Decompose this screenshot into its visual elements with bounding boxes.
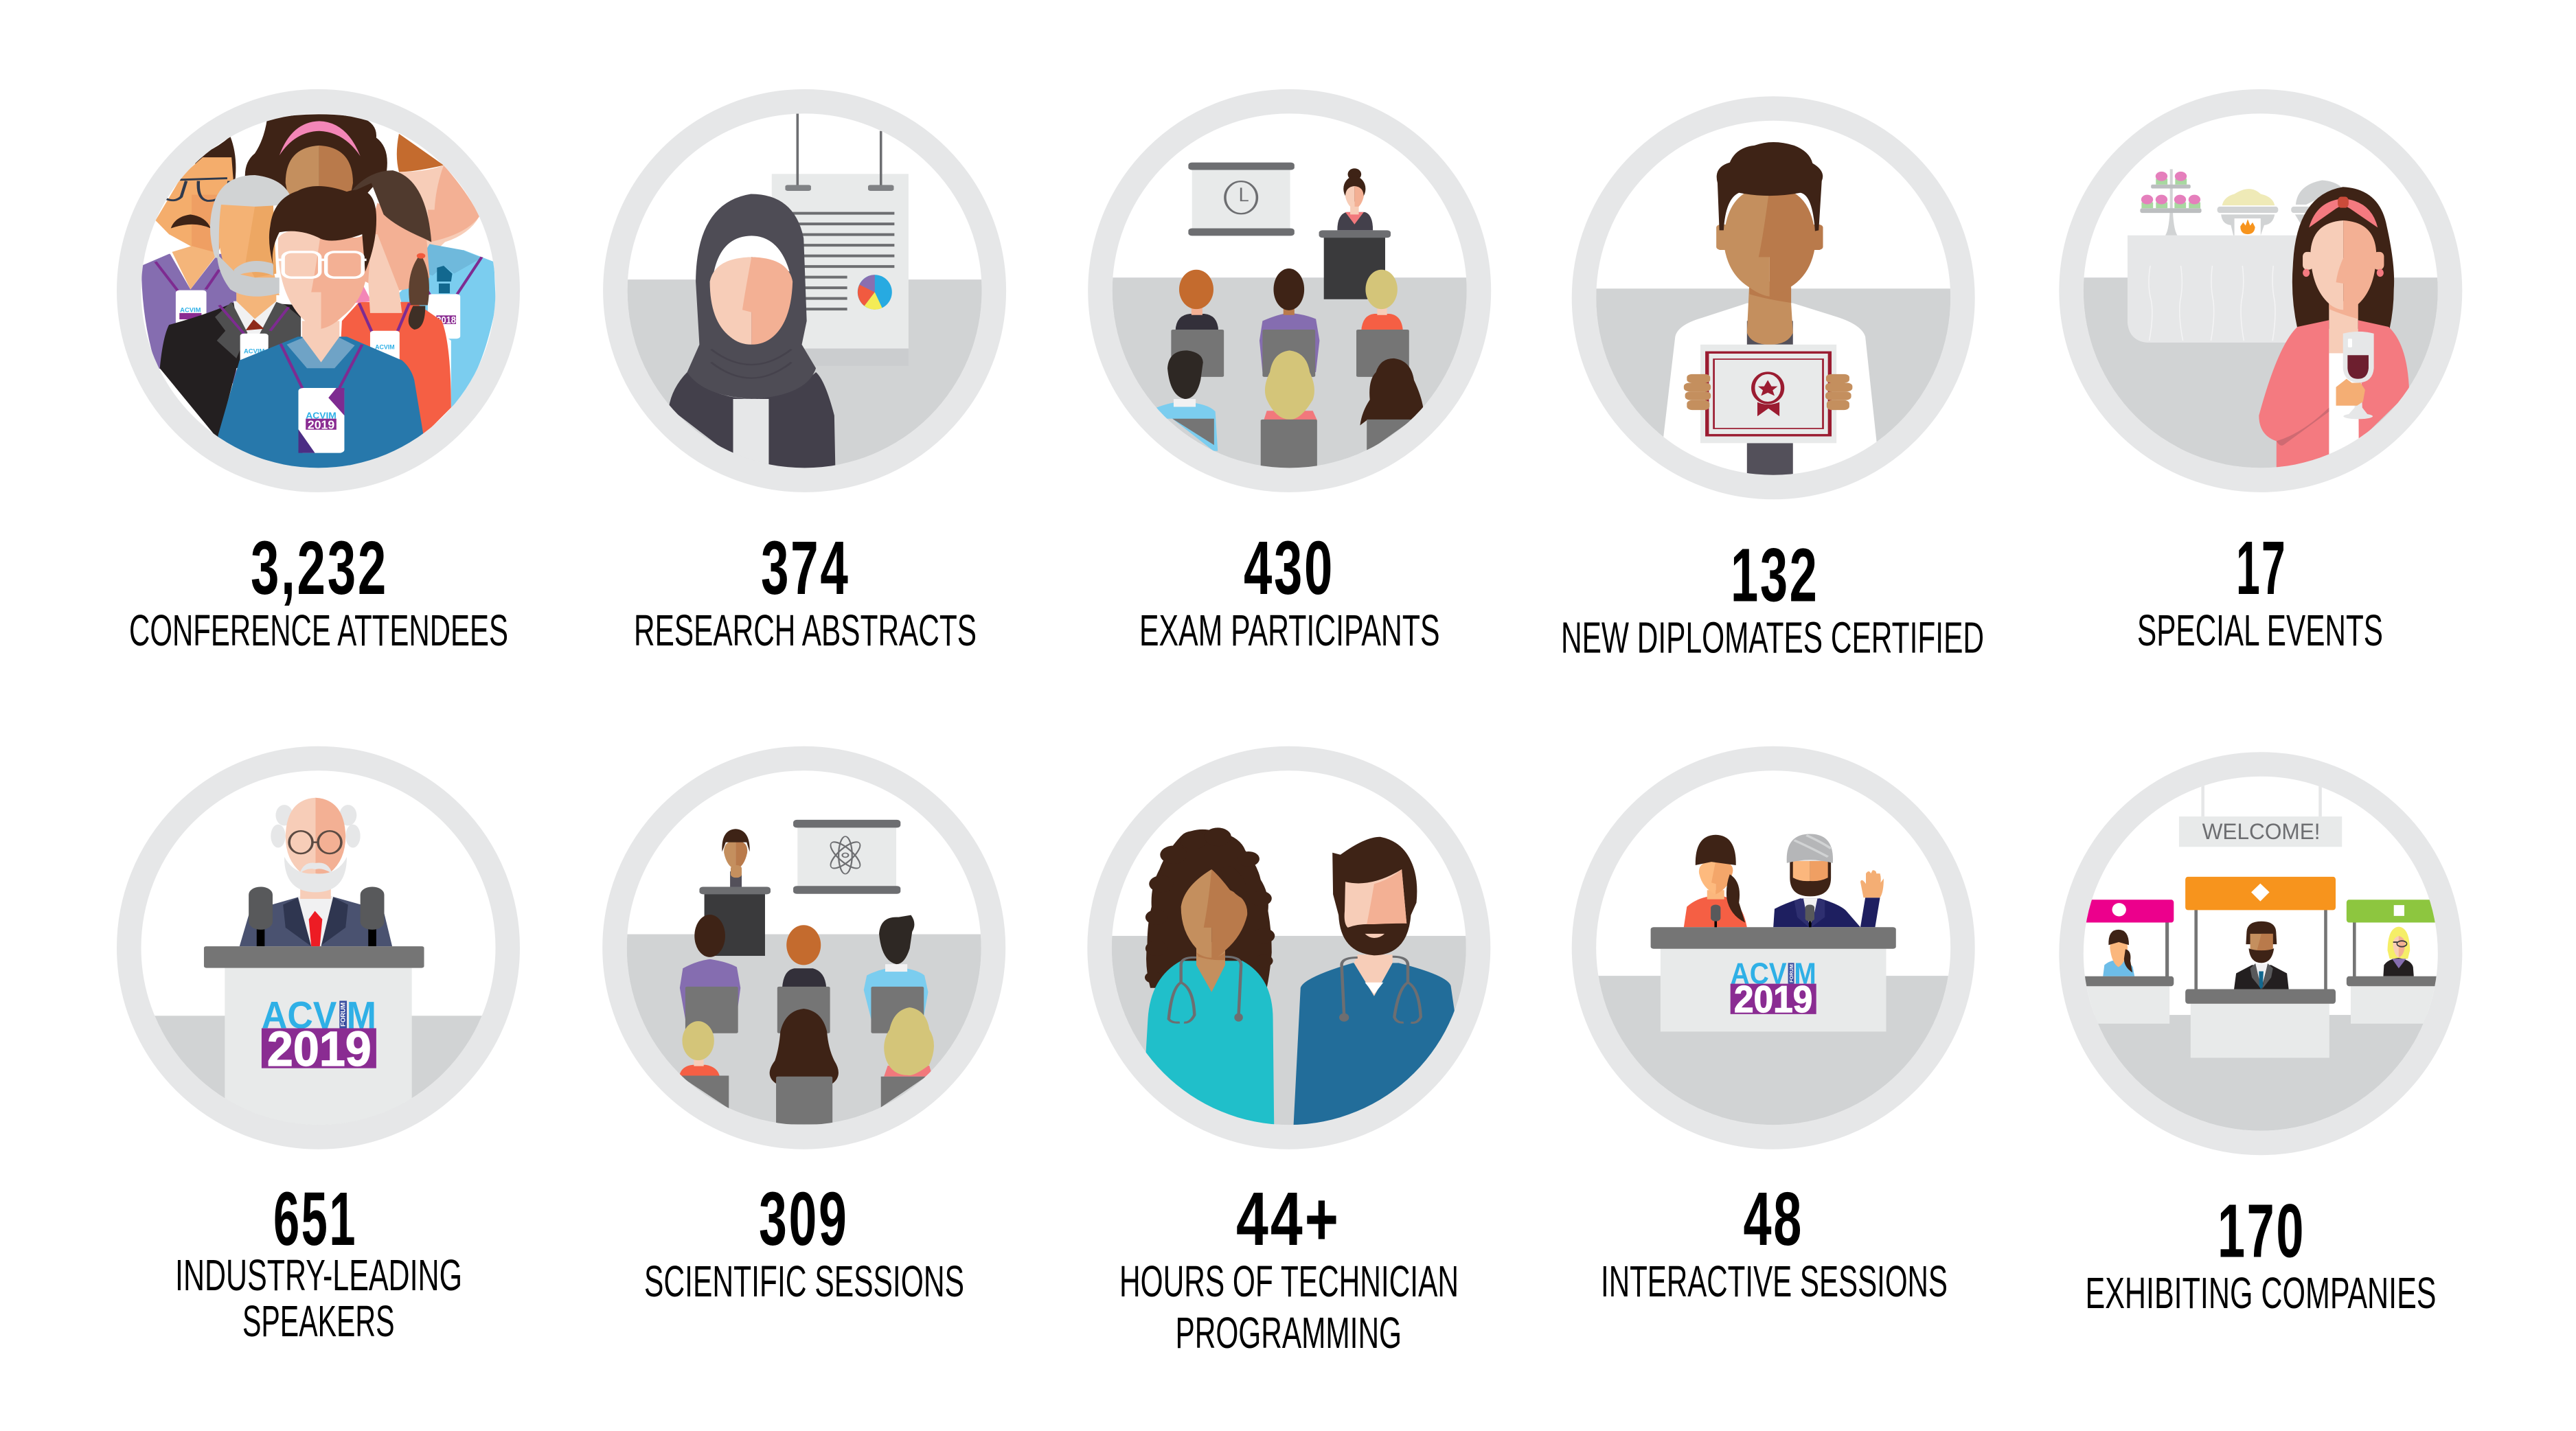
chafing dish with flame (2218, 180, 2341, 236)
welcome sign: WELCOME! (2202, 820, 2321, 844)
microphones (249, 886, 384, 946)
stat number: 48 (1743, 1177, 1803, 1261)
stat number: 170 (2218, 1189, 2305, 1273)
stat number: 651 (273, 1177, 357, 1261)
stat label: PROGRAMMING (1176, 1308, 1402, 1358)
logo: ACVIM Forum 2019: 2019 (267, 1022, 372, 1077)
stat number: 44+ (1236, 1177, 1341, 1261)
seated participants row one (1171, 268, 1409, 377)
logo: ACVIM Forum 2019: FORUM (1789, 964, 1794, 983)
stat number: 430 (1244, 526, 1334, 610)
audience row one (680, 915, 928, 1033)
man with glasses and moustache (141, 137, 236, 384)
logo: ACVIM Forum 2019 (1731, 957, 1816, 1020)
panel: new diplomates certified (1561, 108, 1984, 662)
ring (615, 102, 994, 480)
technician with curly hair and teal scrubs (1141, 827, 1275, 1134)
floor (2079, 277, 2443, 483)
panel: interactive sessions (1580, 758, 1972, 1306)
icon: crowd of attendees with badges (141, 114, 496, 474)
ring (2071, 102, 2450, 480)
seated participants row two (1156, 350, 1423, 470)
technician with beard and blue scrubs (1292, 837, 1457, 1144)
poster with text lines and pie chart (772, 108, 909, 366)
stat label: SPEAKERS (242, 1296, 394, 1346)
logo: ACVIM Forum 2019: ACV M (1731, 957, 1816, 990)
stat label: CONFERENCE ATTENDEES (129, 606, 508, 655)
floor (1580, 976, 1972, 1134)
floor (2079, 1015, 2443, 1136)
ring (1584, 108, 1963, 488)
ring (2071, 764, 2450, 1143)
front man with glasses, blue sweater and badge (218, 186, 424, 474)
stat number: 309 (759, 1177, 849, 1261)
panel: research abstracts (611, 102, 1003, 655)
floor (628, 279, 982, 468)
stat label: SCIENTIFIC SESSIONS (644, 1257, 964, 1306)
speaker at podium (699, 829, 771, 956)
audience row two (679, 1007, 934, 1124)
woman in hijab (669, 194, 836, 479)
logo: ACVIM Forum 2019: FORUM (339, 1003, 347, 1027)
icon: exam room with seated participants (1113, 162, 1467, 468)
logo: ACVIM Forum 2019: 2019 (1734, 978, 1812, 1020)
wine glass and hand (2336, 332, 2374, 419)
left booth with pink roof (2075, 900, 2174, 1024)
stat number: 374 (761, 526, 850, 610)
panelist woman (1684, 835, 1747, 928)
icon: exhibit hall with three booths (2075, 770, 2446, 1136)
panel: exam participants (1089, 102, 1488, 655)
panelist man with turban (1773, 834, 1884, 928)
panel: scientific sessions (611, 758, 1003, 1306)
grey haired man in black suit (160, 175, 301, 439)
panel: conference attendees (129, 102, 508, 655)
welcome sign (2179, 770, 2342, 847)
man with glasses and moustache: ACVIM (180, 306, 201, 314)
stat label: INDUSTRY-LEADING (175, 1250, 462, 1300)
center booth with orange roof (2185, 877, 2336, 1057)
icon: diplomate holding a certificate (1596, 142, 1950, 475)
icon: two panelists at a table (1580, 834, 1972, 1134)
panel: industry-leading speakers (126, 758, 508, 1346)
screen with clock (1188, 163, 1295, 236)
back woman with pink headband (245, 114, 387, 203)
icon: scientific session audience (611, 820, 1003, 1134)
speaker (240, 798, 392, 946)
woman with braid and orange top: ACVIM (375, 343, 395, 351)
stat label (175, 1250, 462, 1346)
man in light blue shirt (397, 134, 496, 408)
stat number: 132 (1731, 533, 1819, 618)
front man with glasses, blue sweater and badge: ACVIM (306, 411, 337, 421)
certificate with ribbon seal (1700, 345, 1836, 443)
floor (1089, 936, 1488, 1136)
panel: special events (2071, 102, 2450, 655)
icon: two veterinary technicians in scrubs (1089, 827, 1488, 1144)
woman with braid and orange top (341, 170, 451, 435)
right booth with green roof (2347, 900, 2446, 1024)
proctor at podium (1319, 168, 1391, 299)
cupcake stand (2140, 169, 2202, 236)
stat label: HOURS OF TECHNICIAN (1119, 1257, 1459, 1306)
icon: woman in hijab presenting a poster (628, 114, 982, 468)
ring (1100, 102, 1479, 480)
ring (129, 102, 508, 480)
stat number: 17 (2236, 526, 2287, 610)
table (1651, 927, 1896, 1031)
floor (1596, 288, 1950, 474)
panel: exhibiting companies (2071, 764, 2450, 1318)
stat label: INTERACTIVE SESSIONS (1601, 1257, 1948, 1306)
stat label: EXAM PARTICIPANTS (1139, 606, 1439, 655)
ring (1584, 758, 1963, 1137)
ring (129, 758, 508, 1137)
hands holding certificate (1684, 374, 1852, 410)
stat label: RESEARCH ABSTRACTS (634, 606, 977, 655)
floor (126, 1016, 506, 1141)
screen with atom symbol (793, 820, 900, 894)
stat number: 3,232 (251, 526, 388, 610)
buffet table (2128, 236, 2306, 343)
floor (611, 935, 1003, 1134)
panel: hours of technician programming (1089, 758, 1488, 1358)
icon: speaker at ACVIM podium (126, 798, 506, 1141)
front man with glasses, blue sweater and badge: 2019 (308, 418, 334, 431)
floor (1113, 277, 1467, 468)
icon: woman with wine at a reception buffet (2079, 169, 2443, 483)
stat label: SPECIAL EVENTS (2137, 606, 2383, 655)
stat label: NEW DIPLOMATES CERTIFIED (1561, 613, 1984, 662)
man in light blue shirt: 2018 (436, 314, 456, 326)
logo: ACVIM Forum 2019 (262, 994, 376, 1077)
head and neck (1716, 142, 1823, 345)
undershirt (1747, 321, 1793, 483)
grey haired man in black suit: ACVIM (244, 347, 264, 355)
podium (204, 946, 424, 1134)
ring (615, 758, 993, 1137)
woman with headband (2259, 187, 2409, 479)
logo: ACVIM Forum 2019: ACV M (262, 994, 376, 1036)
ring (1099, 758, 1479, 1137)
white coat (1663, 304, 1877, 486)
stat label (1119, 1257, 1459, 1358)
